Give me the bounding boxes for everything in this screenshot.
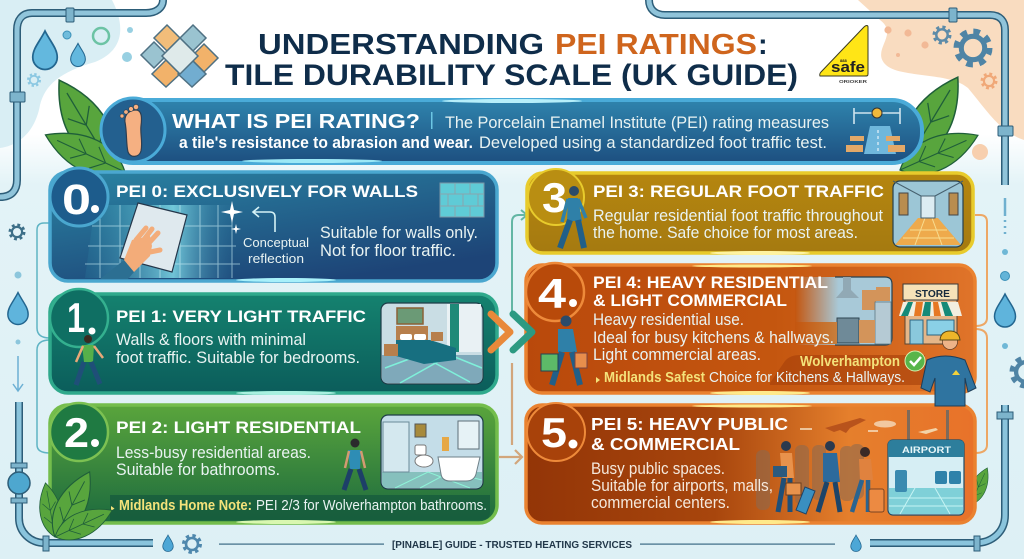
description: foot traffic. Suitable for bedrooms.	[116, 348, 360, 367]
panel: PEI 4	[526, 263, 975, 395]
connector: centre to PEI 5	[499, 363, 522, 464]
caption: conceptual reflection: Conceptual	[243, 235, 309, 250]
icon: foot traffic test rig	[846, 108, 905, 154]
description: the home. Safe choice for most areas.	[593, 223, 858, 242]
description: Ideal for busy kitchens & hallways.	[593, 328, 834, 347]
connector: right column	[975, 215, 987, 453]
illustration: planes in sky	[800, 418, 938, 434]
description: Suitable for bathrooms.	[116, 460, 280, 479]
arrow: green chevron	[513, 314, 532, 350]
description: a tile's resistance to abrasion and wear.	[179, 133, 473, 152]
badge: 3: 3	[542, 174, 567, 221]
icon: foot	[101, 98, 165, 162]
heading: PEI 2: LIGHT RESIDENTIAL	[116, 418, 361, 437]
badge: 1: 1	[67, 294, 85, 341]
footer: [PINABLE] GUIDE - TRUSTED HEATING SERVICES	[392, 540, 632, 551]
heading: PEI 5: HEAVY PUBLIC	[591, 414, 788, 434]
note: midlands safest	[596, 369, 905, 386]
illustration: store front	[899, 284, 962, 344]
title: UNDERSTANDING	[258, 29, 544, 61]
icon: gas safe badge: safe	[831, 59, 865, 76]
panel: what is PEI rating	[101, 98, 922, 163]
connector: left column	[37, 223, 50, 453]
description	[116, 330, 360, 367]
background blob: blue top-left	[0, 0, 120, 148]
badge: 5: 5	[541, 409, 567, 456]
title	[225, 29, 798, 92]
note: midlands home: Midlands Home Note:	[119, 497, 252, 514]
title: TILE DURABILITY SCALE (UK GUIDE)	[225, 59, 798, 92]
description: Walls & floors with minimal	[116, 330, 306, 349]
pipe: top-right	[649, 0, 1013, 185]
badge: 3	[528, 169, 584, 225]
note: midlands safest: Choice for Kitchens & Hallways.	[709, 369, 905, 386]
description: Suitable for airports, malls,	[591, 476, 773, 495]
icon: walking person with bags	[541, 316, 587, 385]
badge: 2: 2	[64, 409, 89, 456]
note: midlands home: PEI 2/3 for Wolverhampton bathrooms.	[256, 497, 487, 514]
heading: PEI 3: REGULAR FOOT TRAFFIC	[593, 182, 884, 201]
panel: PEI 2	[50, 403, 497, 524]
badge: 1	[50, 289, 108, 347]
heading	[591, 414, 788, 454]
background blob: peach top-right	[858, 0, 1024, 140]
pipe: top-left	[0, 0, 163, 197]
badge: 5	[527, 403, 585, 461]
illustration: hallway	[893, 181, 963, 247]
illustration: airport sign: AIRPORT	[902, 445, 951, 456]
illustration: glossy wall tiles	[85, 201, 243, 279]
heading: PEI 4: HEAVY RESIDENTIAL	[593, 273, 828, 292]
panel: PEI 1	[50, 289, 497, 395]
icon: gas safe badge: ORIOKER	[839, 79, 868, 84]
description: Regular residential foot traffic throughout	[593, 206, 883, 225]
illustration: kitchen	[795, 277, 892, 345]
heading	[593, 273, 828, 310]
arrow: orange chevron	[491, 314, 510, 350]
icon: gas safe badge: 888	[840, 58, 847, 63]
description: commercial centers.	[591, 493, 730, 512]
leaf: lower right	[963, 465, 994, 508]
title: PEI RATINGS	[555, 29, 757, 61]
description	[593, 206, 883, 242]
note: midlands home	[111, 497, 487, 514]
badge: 2	[50, 403, 108, 461]
caption: conceptual reflection	[243, 235, 309, 266]
leaves behind banner: left	[38, 70, 132, 187]
panel: PEI 5	[526, 403, 975, 524]
badge: 4	[526, 263, 584, 321]
icon: walking person	[76, 335, 103, 385]
badge: 0	[50, 168, 108, 226]
icon: worker	[921, 331, 976, 406]
description	[593, 310, 834, 364]
panel: PEI 3	[527, 169, 973, 255]
icon: footer drop	[163, 535, 173, 552]
description	[116, 443, 311, 479]
leaves: bottom-left	[35, 465, 117, 548]
arrow: reflection	[253, 207, 275, 232]
decorative gears and dots: top-right	[884, 26, 996, 160]
description	[179, 113, 829, 152]
decorative water drops and dots: top-left	[28, 27, 133, 86]
description: Not for floor traffic.	[320, 241, 456, 260]
illustration: bathroom	[381, 415, 483, 489]
icon: tile cluster	[141, 25, 218, 87]
description: Busy public spaces.	[591, 459, 725, 478]
pipe: bottom-right	[870, 405, 1013, 551]
icon: walking person	[344, 438, 366, 490]
decorative icons: right margin	[994, 198, 1024, 385]
description	[320, 223, 478, 260]
leaves behind banner: right	[888, 67, 985, 185]
heading: WHAT IS PEI RATING?	[172, 111, 420, 133]
caption: conceptual reflection: reflection	[248, 251, 304, 266]
connector: centre to PEI 3	[512, 210, 527, 312]
illustration: airport sign	[888, 410, 964, 515]
description: Developed using a standardized foot traffic test.	[479, 133, 827, 152]
callout: wolverhampton: Wolverhampton	[800, 353, 900, 370]
description: The Porcelain Enamel Institute (PEI) rating measures	[445, 113, 829, 132]
note: midlands safest: Midlands Safest	[604, 369, 705, 386]
heading: PEI 1: VERY LIGHT TRAFFIC	[116, 307, 366, 326]
footer	[163, 535, 861, 552]
badge: 0: 0	[62, 176, 91, 224]
title: :	[758, 29, 768, 61]
description: Heavy residential use.	[593, 310, 744, 329]
illustration: store front: STORE	[915, 288, 950, 300]
description: Less-busy residential areas.	[116, 443, 311, 462]
description	[591, 459, 773, 512]
heading: & COMMERCIAL	[591, 434, 740, 454]
description: Suitable for walls only.	[320, 223, 478, 242]
icon: wall tile swatch	[440, 183, 484, 217]
decorative icons: left margin	[8, 225, 28, 391]
heading: & LIGHT COMMERCIAL	[593, 291, 787, 310]
panel: PEI 0	[50, 168, 497, 282]
pipe: bottom-left with valve	[8, 402, 153, 551]
icon: walking person	[560, 186, 586, 248]
heading: PEI 0: EXCLUSIVELY FOR WALLS	[116, 182, 418, 201]
badge: 4: 4	[538, 270, 567, 317]
icon: gas safe badge	[820, 26, 868, 84]
illustration: travellers crowd	[756, 441, 884, 514]
description: Light commercial areas.	[593, 345, 761, 364]
illustration: bedroom	[381, 303, 483, 384]
